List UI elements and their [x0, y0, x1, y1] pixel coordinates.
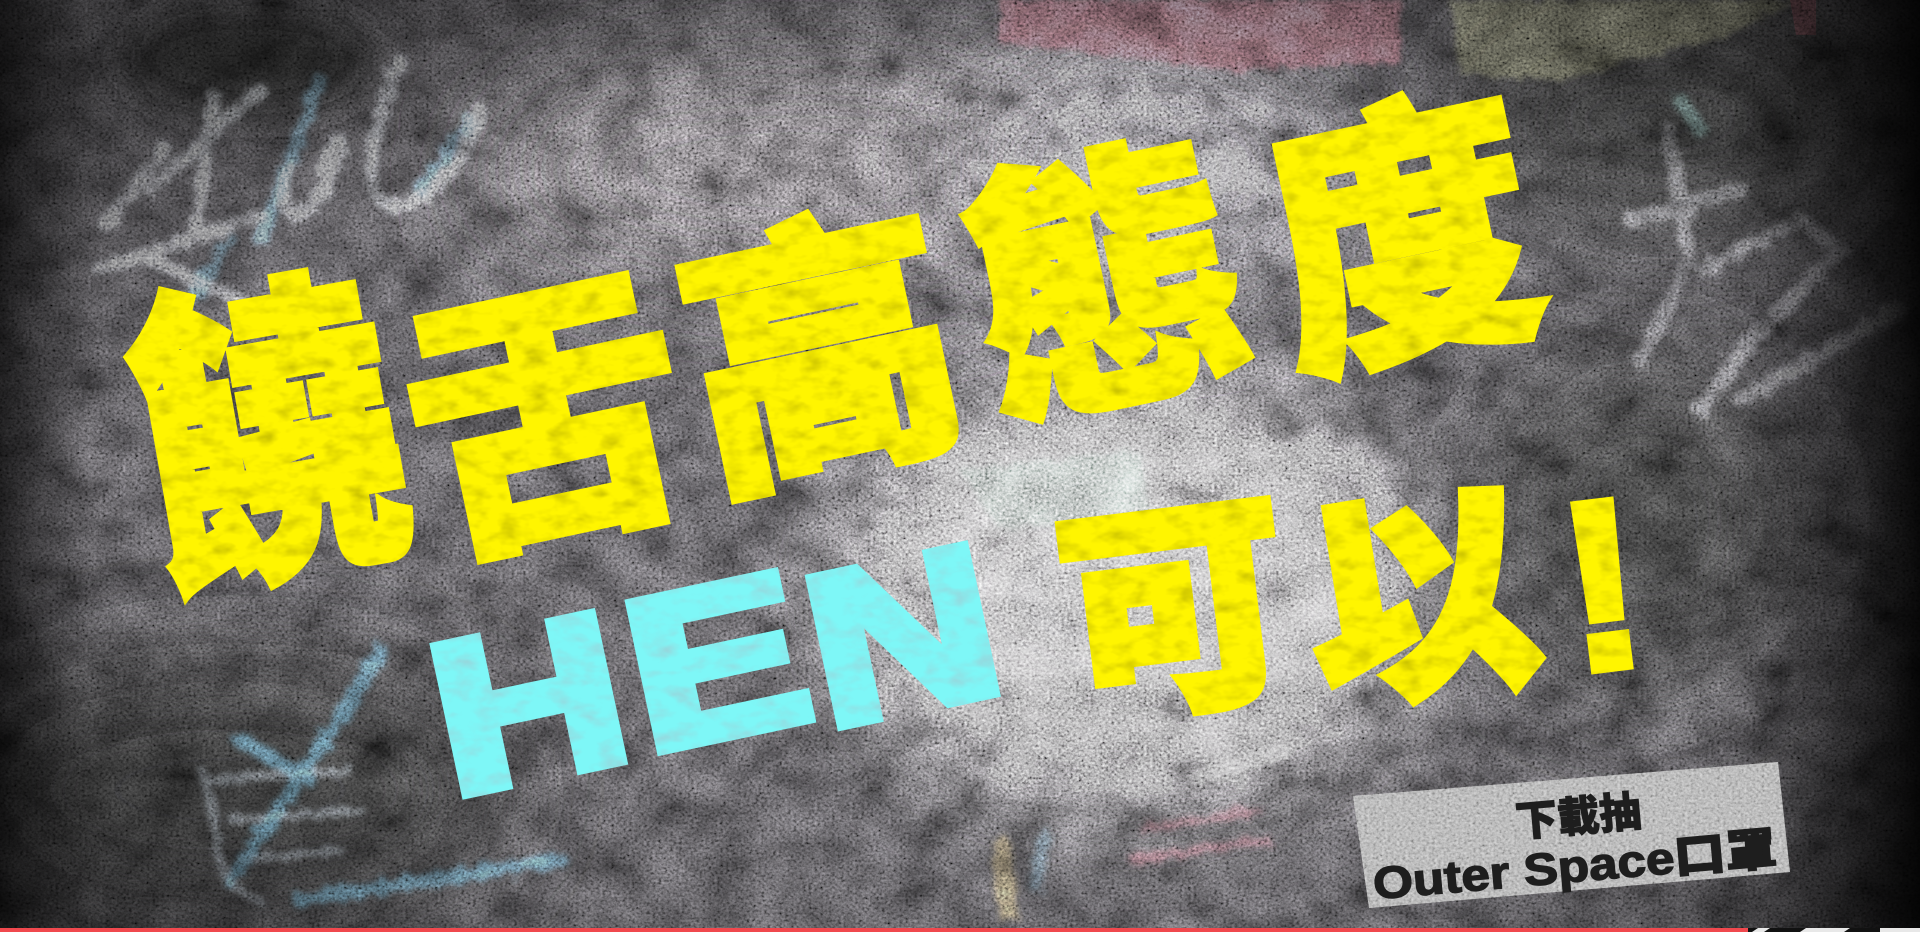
chalk scribbles bottom left [200, 650, 560, 900]
tag: download prize [1353, 762, 1790, 908]
HEN in cyan: N [786, 497, 1020, 773]
title: 饒舌高態度: 度 [1241, 62, 1567, 420]
title: 饒舌高態度 [110, 62, 1567, 639]
headline: 可以! [1047, 447, 1658, 754]
title: 饒舌高態度: 態 [943, 109, 1273, 468]
red chalk patch [1000, 0, 1400, 70]
chalk scribbles top left [98, 60, 480, 320]
title: 饒舌高態度: 高 [657, 178, 987, 537]
tag line 2: Outer Space口罩 [1371, 824, 1779, 910]
HEN in cyan: E [605, 525, 828, 798]
headline: 可以!: 可 [1047, 474, 1304, 754]
bottom right stripes [1748, 928, 1920, 932]
title: 饒舌高態度: 舌 [380, 241, 716, 602]
headline: 可以!: ! [1546, 447, 1658, 723]
bottom red bar [0, 928, 1748, 932]
title: 饒舌高態度: 饒 [110, 243, 429, 639]
HEN in cyan [410, 497, 1020, 842]
olive chalk patch [1450, 0, 1800, 80]
faint colour marks centre and lower right [960, 450, 1290, 920]
tag line 1: 下載抽 [1514, 788, 1643, 846]
HEN in cyan: H [410, 566, 647, 842]
headline: 可以!: 以 [1294, 460, 1551, 740]
chalk scribbles right [1630, 100, 1900, 410]
